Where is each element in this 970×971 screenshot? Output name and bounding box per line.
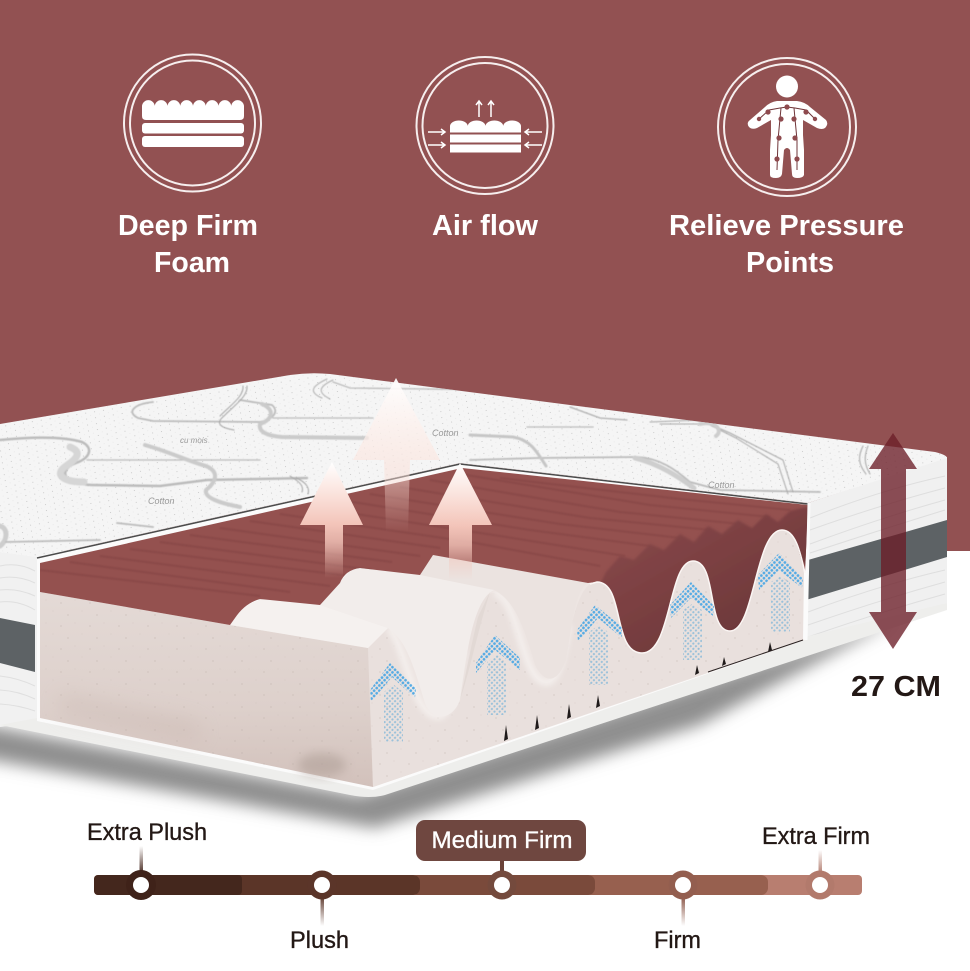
icon: blue airflow arrow 4 [670,582,714,660]
maroon comfort layer [40,468,815,660]
marker: firm [668,870,698,900]
arrow: mattress height dimension [869,433,917,649]
frame shadow line under fabric [37,464,808,558]
heading: Relieve Pressure Points: Points [746,247,834,279]
cutaway frame [37,463,808,790]
mattress side panel: right [805,457,947,650]
mattress top quilted fabric: cu mois [180,436,208,445]
scale segment: medium [232,875,420,895]
heading: Relieve Pressure Points: Relieve Pressure [669,210,904,242]
stem: plush [320,896,324,926]
stem: firm [682,896,685,926]
icon: air flow [416,57,554,194]
marker: extra firm [806,870,834,900]
foam core: front block [40,592,373,787]
mattress cutaway illustration [0,373,947,797]
stem: medium firm [500,860,504,874]
heading: Relieve Pressure Points [669,210,904,279]
scale segment: extra firm [585,875,768,895]
marker: plush [308,870,336,900]
scale segment: firm [410,875,595,895]
heading: Deep Firm Foam [118,210,258,279]
foam rear ridge [420,555,588,679]
mattress top quilted fabric: Cotton [708,480,735,490]
arrow: left airflow [300,462,363,578]
mattress side panel: left [0,552,37,727]
firmness scale [94,846,862,926]
stem: extra firm [818,850,822,874]
heading: Deep Firm Foam: Deep Firm [118,210,258,242]
label: Firm: Firm [654,927,701,954]
mattress shadow [0,618,900,828]
background: maroon upper area [0,0,970,551]
foam core: rear surface [230,555,805,787]
foam core: wave cross-section [368,530,804,787]
arrow: right airflow [429,463,492,580]
arrow: rear airflow [353,378,440,532]
icon: blue airflow arrow 2 [476,635,520,715]
label: Medium Firm pill: Medium Firm [432,827,572,854]
heading: Deep Firm Foam: Foam [154,247,230,279]
icon: blue airflow arrow 5 [758,553,803,632]
label: Medium Firm pill [416,820,586,861]
foam base slits [504,640,803,741]
label: Plush: Plush [290,927,349,954]
icon: blue airflow arrow 1 [370,663,416,742]
icon: deep firm foam layers [124,54,261,192]
label: Extra Plush: Extra Plush [87,819,207,846]
icon: blue airflow arrow 3 [577,605,622,685]
mattress top quilted fabric [0,373,947,557]
right frame edge [806,503,809,640]
icon: relieve pressure points body [718,58,856,196]
foam ridge top highlight [230,599,388,648]
foam second ridge [320,568,494,716]
marker: extra plush [126,870,156,900]
stem: extra plush [140,846,143,874]
label: 27 CM: 27 CM [851,671,941,703]
mattress top quilted fabric: Cotton [432,428,459,438]
label: Extra Firm: Extra Firm [762,823,870,850]
mattress top quilted fabric: Cotton [148,496,175,506]
marker: medium firm [488,870,516,900]
mattress base strip [0,603,947,797]
scale segment: plush [94,875,242,895]
heading: Air flow: Air flow [432,210,538,242]
